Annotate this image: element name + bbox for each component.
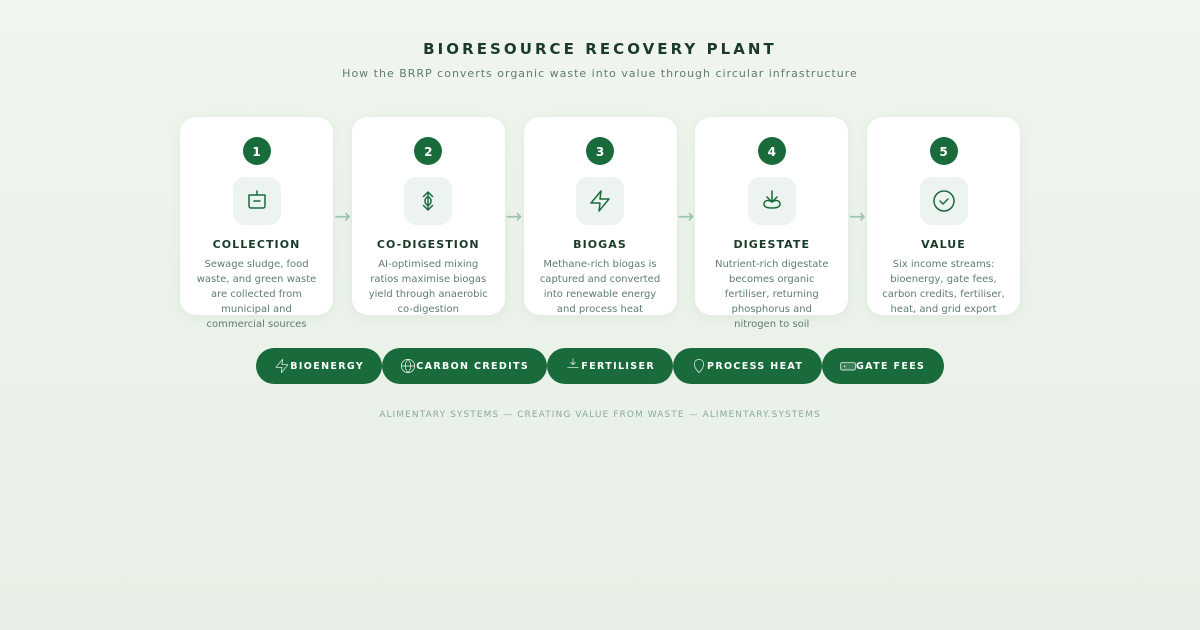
icon: digestate to soil	[748, 177, 796, 225]
step badge 3	[586, 137, 614, 165]
icon: mixing arrows	[404, 177, 452, 225]
label: bioenergy: BIOENERGY	[290, 361, 364, 372]
icon: check circle	[920, 177, 968, 225]
heading: co-digestion: CO-DIGESTION	[377, 238, 480, 251]
step badge 4	[758, 137, 786, 165]
panel: step 3 biogas	[524, 117, 676, 315]
panel: step 4 digestate	[695, 117, 848, 315]
pill: fertiliser	[547, 348, 673, 384]
step badge 3: 3	[596, 145, 604, 159]
icon: ticket card	[840, 362, 856, 370]
icon: download to ground	[567, 358, 579, 368]
description: biogas: Methane-rich biogas is captured and converted into renewable energy and process heat	[540, 259, 660, 315]
subtitle: How the BRRP converts organic waste into value through circular infrastructure	[342, 67, 858, 80]
panel: step 5 value	[867, 117, 1020, 315]
description: collection: Sewage sludge, food waste, and green waste are collected from municipal and commercial sources	[197, 259, 316, 330]
heading: digestate: DIGESTATE	[733, 238, 810, 251]
step badge 1	[242, 137, 270, 165]
step badge 5: 5	[939, 145, 948, 159]
panel: step 1 collection	[180, 117, 333, 315]
description: co-digestion: AI-optimised mixing ratios maximise biogas yield through anaerobic co-digestion	[369, 259, 488, 315]
title: BIORESOURCE RECOVERY PLANT	[423, 40, 777, 58]
step badge 5	[930, 137, 958, 165]
heading: biogas: BIOGAS	[573, 238, 627, 251]
step badge 2: 2	[424, 145, 432, 159]
step badge 4: 4	[768, 145, 776, 159]
pill: gate fees	[822, 348, 944, 384]
footer: ALIMENTARY SYSTEMS — CREATING VALUE FROM WASTE — ALIMENTARY.SYSTEMS	[379, 410, 821, 420]
icon: globe	[401, 359, 415, 373]
arrow 4 to 5: →	[849, 204, 866, 228]
arrow 3 to 4: →	[678, 204, 694, 228]
panel: step 2 co-digestion	[352, 117, 505, 315]
arrow 1 to 2: →	[334, 204, 351, 228]
icon: bolt	[276, 359, 288, 373]
label: gate fees: GATE FEES	[856, 361, 925, 372]
icon: collection bin	[232, 177, 280, 225]
step badge 1: 1	[252, 145, 261, 159]
label: fertiliser: FERTILISER	[581, 361, 655, 372]
heading: collection: COLLECTION	[213, 238, 300, 251]
pill: bioenergy	[256, 348, 382, 384]
icon: heat drop	[694, 359, 704, 373]
heading: value: VALUE	[921, 238, 966, 251]
label: carbon credits: CARBON CREDITS	[416, 361, 529, 372]
arrow 2 to 3: →	[506, 204, 522, 228]
description: value: Six income streams: bioenergy, gate fees, carbon credits, fertiliser, heat, and grid export	[882, 259, 1005, 315]
description: digestate: Nutrient-rich digestate becomes organic fertiliser, returning phosphorus and nitrogen to soil	[715, 259, 828, 330]
pill: carbon credits	[382, 348, 547, 384]
pill: process heat	[673, 348, 822, 384]
step badge 2	[414, 137, 442, 165]
icon: lightning bolt	[576, 177, 624, 225]
label: process heat: PROCESS HEAT	[707, 361, 803, 372]
